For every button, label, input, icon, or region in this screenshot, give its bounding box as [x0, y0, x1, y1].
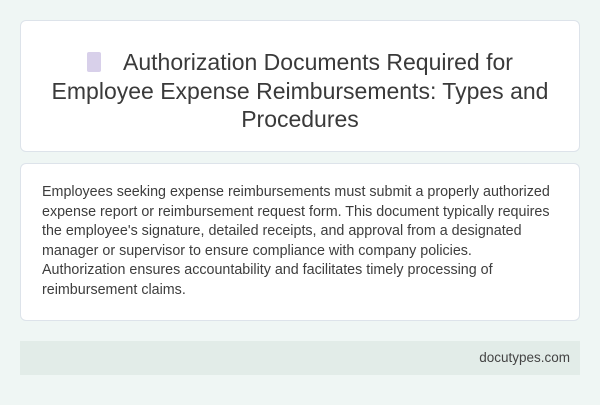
title: Employee Expense Reimbursements: Types and — [52, 78, 548, 104]
text block: the employee's signature, detailed receipts, and approval from a designated — [42, 223, 522, 239]
icon: document — [87, 52, 101, 72]
title: Procedures — [241, 106, 359, 132]
text block: reimbursement claims. — [42, 282, 186, 298]
title: Authorization Documents Required for — [123, 49, 513, 75]
title — [52, 49, 548, 132]
footer — [20, 341, 580, 375]
text block: expense report or reimbursement request form. This document typically requires — [42, 204, 550, 220]
footer: docutypes.com — [479, 350, 570, 365]
text block — [42, 184, 550, 298]
text block: Authorization ensures accountability and facilitates timely processing of — [42, 262, 493, 278]
text block: manager or supervisor to ensure compliance with company policies. — [42, 242, 472, 258]
panel: description — [20, 163, 580, 321]
panel: title card — [20, 20, 580, 152]
text block: Employees seeking expense reimbursements must submit a properly authorized — [42, 184, 550, 200]
